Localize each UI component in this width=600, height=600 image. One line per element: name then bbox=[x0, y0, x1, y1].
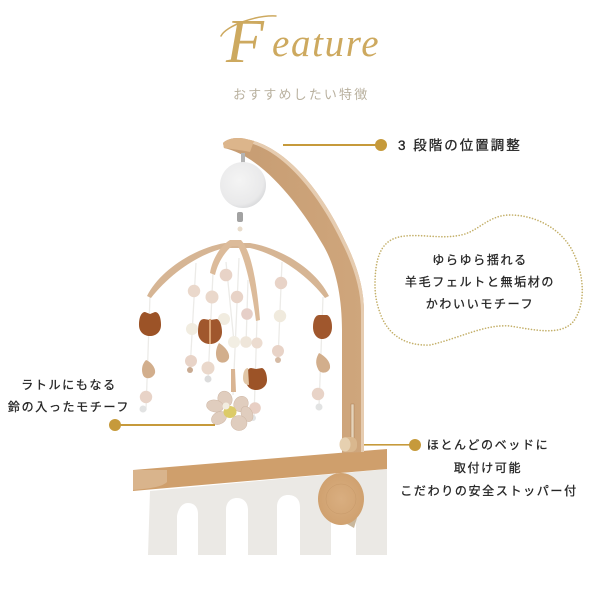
mobile arches bbox=[147, 240, 329, 321]
music box bbox=[220, 153, 266, 232]
felt balls bbox=[140, 269, 324, 421]
callout text: motif bbox=[405, 253, 555, 311]
callout line: rattle bbox=[109, 419, 215, 431]
callout text: stopper: こだわりの安全ストッパー付 bbox=[400, 484, 578, 498]
callout text: rattle bbox=[8, 378, 130, 414]
peg bbox=[340, 437, 357, 452]
white crib panel bbox=[148, 469, 387, 555]
title: Feature bbox=[221, 8, 380, 76]
callout text: motif: 羊毛フェルトと無垢材の bbox=[405, 274, 555, 289]
rattle stick bbox=[231, 369, 236, 392]
callout line: adjustment bbox=[283, 139, 387, 151]
title: Feature: F bbox=[225, 8, 265, 76]
callout text: rattle: ラトルにもなる bbox=[21, 378, 117, 392]
rail clamp bbox=[133, 470, 167, 490]
callout text: stopper: ほとんどのベッドに bbox=[427, 438, 549, 452]
callout text: stopper: 取付け可能 bbox=[454, 461, 522, 475]
callout: dotted blob bbox=[375, 215, 582, 345]
callout line: stopper bbox=[364, 439, 421, 451]
callout text: stopper bbox=[400, 438, 578, 498]
callout text: motif: ゆらゆら揺れる bbox=[432, 253, 528, 267]
callout text: motif: かわいいモチーフ bbox=[426, 297, 534, 311]
felt tulips bbox=[139, 312, 332, 390]
callout text: rattle: 鈴の入ったモチーフ bbox=[8, 400, 130, 414]
wooden rail bbox=[133, 449, 387, 491]
callout label: adjustment: 3 段階の位置調整 bbox=[398, 138, 522, 153]
slot bbox=[351, 404, 354, 440]
subtitle: おすすめしたい特徴 bbox=[233, 87, 369, 102]
crib bbox=[133, 449, 387, 555]
title: Feature: eature bbox=[272, 22, 380, 65]
mobile strings bbox=[146, 258, 323, 418]
crochet flower bbox=[206, 389, 255, 432]
main wooden arm bbox=[223, 138, 364, 453]
felt leaves bbox=[142, 343, 330, 378]
round knob bbox=[318, 473, 364, 528]
